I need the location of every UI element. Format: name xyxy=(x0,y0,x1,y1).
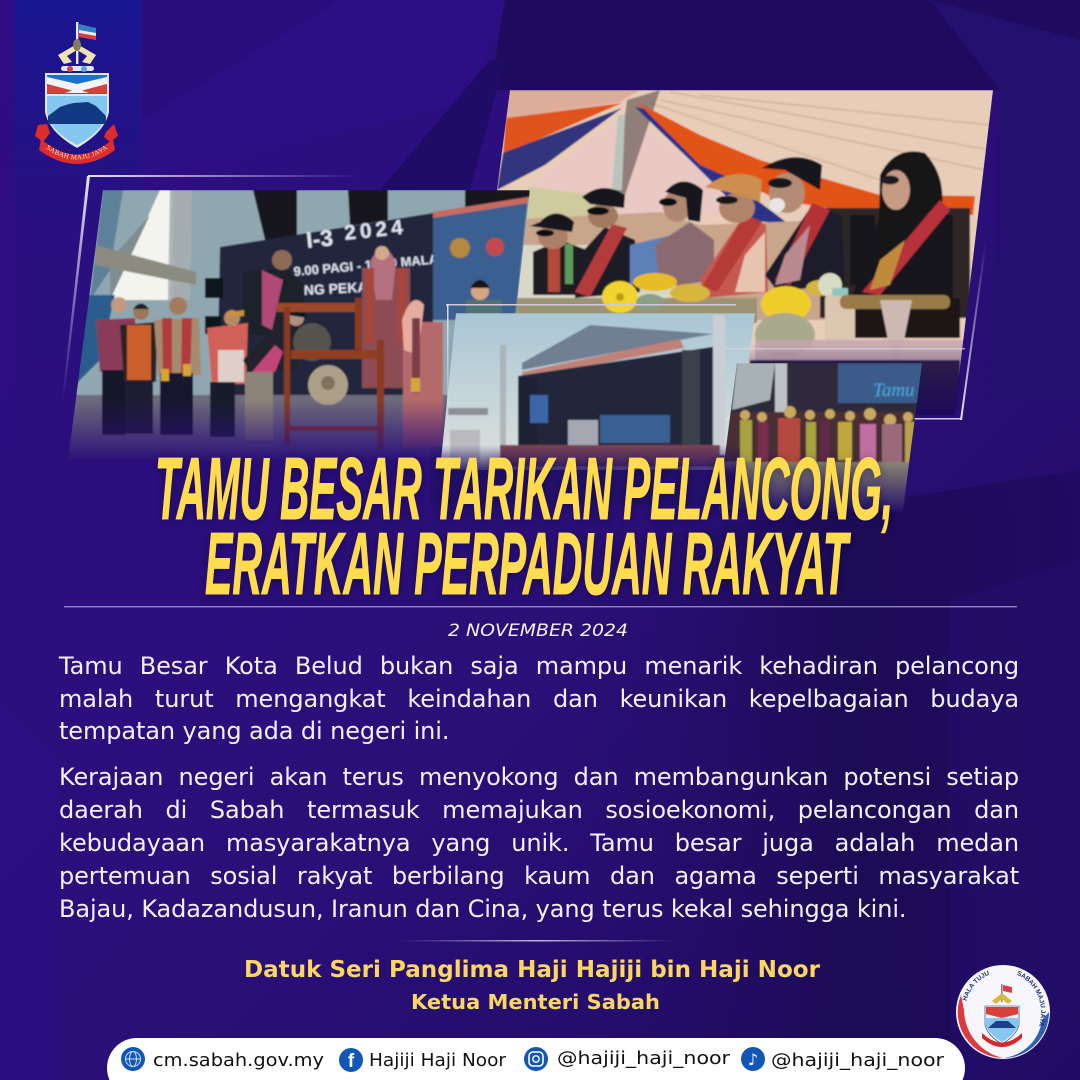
title xyxy=(155,439,893,613)
LED screen with event text xyxy=(217,213,449,395)
facebook link: Hajiji Haji Noor xyxy=(369,1050,507,1071)
body text xyxy=(58,652,1019,923)
photo frame lines xyxy=(62,175,987,420)
ribbon: Sabah Maju Jaya: SABAH MAJU JAYA xyxy=(46,145,108,160)
logo: Hala Tuju badge xyxy=(956,965,1050,1059)
paragraph 2: Kerajaan negeri akan terus menyokong dan membangunkan potensi setiap xyxy=(59,763,1019,791)
instagram link xyxy=(524,1047,731,1071)
paragraph 2: pertemuan sosial rakyat berbilang kaum dan agama seperti masyarakat xyxy=(59,862,1019,890)
paragraph 1: malah turut mengangkat keindahan dan keunikan kepelbagaian budaya xyxy=(59,685,1019,713)
photo: main stage xyxy=(440,313,760,473)
divider xyxy=(64,606,1017,607)
paragraph 1 xyxy=(58,652,1019,745)
official e xyxy=(762,157,845,292)
photo: dancers xyxy=(720,363,939,513)
official f xyxy=(853,151,953,300)
tiktok link: @hajiji_haji_noor xyxy=(771,1050,945,1071)
photo: officials under tent xyxy=(490,90,1000,410)
tiktok link: ♪ xyxy=(748,1050,758,1069)
ribbon: Sabah Maju Jaya xyxy=(35,124,118,164)
logo: Hala Tuju badge: HALA TUJU xyxy=(962,970,989,1001)
LED screen with event text: 2024 xyxy=(343,216,408,245)
photo fade xyxy=(60,400,530,462)
website link: cm.sabah.gov.my xyxy=(153,1050,324,1071)
signature divider xyxy=(400,940,675,942)
flowers and table xyxy=(497,273,965,410)
photo: dancers: Tamu Be xyxy=(873,380,939,401)
LED screen with event text: 9.00 PAGI - 10.00 MALAM xyxy=(293,250,449,279)
gong stand xyxy=(277,298,384,450)
website link xyxy=(121,1047,324,1071)
signatory name: Datuk Seri Panglima Haji Hajiji bin Haji Noor xyxy=(244,957,821,983)
official d xyxy=(700,174,768,298)
LED screen with event text: NG PEKAN xyxy=(303,278,378,298)
paragraph 2: kebudayaan masyarakatnya yang unik. Tamu besar juga adalah medan xyxy=(59,829,1019,857)
signatory role: Ketua Menteri Sabah xyxy=(411,990,660,1014)
photo: gong ceremony xyxy=(60,190,540,470)
photo fade xyxy=(740,345,965,415)
title backdrop fade xyxy=(430,445,915,512)
social links bar xyxy=(107,1038,965,1080)
inner frame lines xyxy=(446,304,965,444)
facebook link: f xyxy=(348,1051,355,1072)
paragraph 2 xyxy=(59,763,1019,923)
seated officials xyxy=(530,151,953,300)
people on stage xyxy=(96,246,443,447)
LED screen with event text: I-3 xyxy=(305,224,334,253)
paragraph 1: tempatan yang ada di negeri ini. xyxy=(59,717,449,745)
official c xyxy=(655,181,714,288)
paragraph 1: Tamu Besar Kota Belud bukan saja mampu menarik kehadiran pelancong xyxy=(59,652,1019,680)
official b xyxy=(573,188,640,298)
paragraph 2: daerah di Sabah termasuk memajukan sosioekonomi, pelancongan dan xyxy=(59,796,1019,824)
logo: Sabah coat of arms xyxy=(35,22,118,164)
instagram link: @hajiji_haji_noor xyxy=(557,1048,731,1069)
logo: Hala Tuju badge: SABAH MAJU JAYA xyxy=(1017,971,1046,1026)
shield xyxy=(45,73,109,148)
paragraph 2: Bajau, Kadazandusun, Iranun dan Cina, yang terus kekal sehingga kini. xyxy=(59,895,906,923)
tiktok link xyxy=(741,1047,945,1071)
flag and arms crest xyxy=(58,22,96,72)
official a xyxy=(530,214,590,295)
tent stripes xyxy=(650,92,990,180)
date: 2 NOVEMBER 2024 xyxy=(448,621,628,641)
facebook link xyxy=(339,1048,507,1072)
